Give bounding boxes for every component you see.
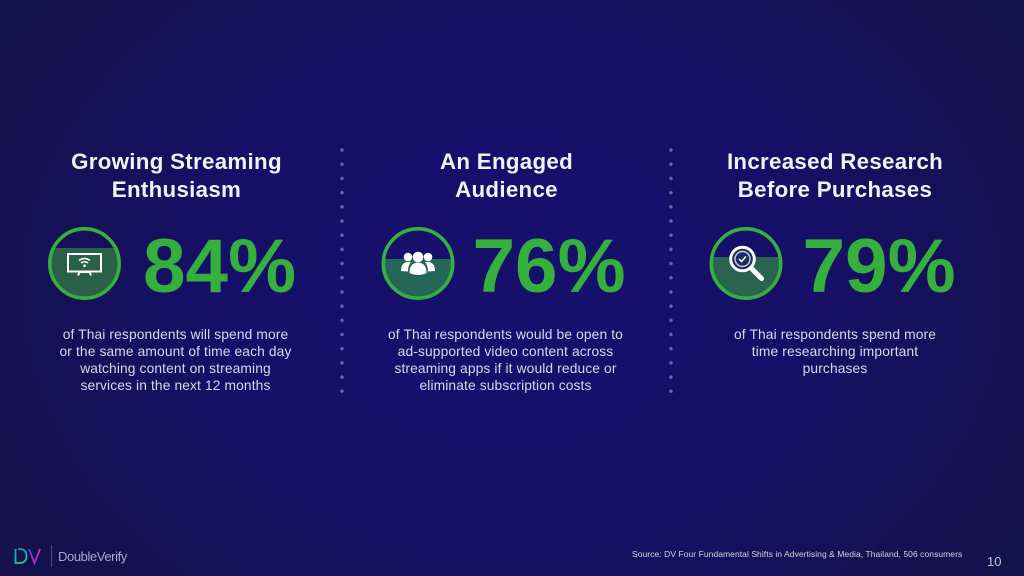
body text: time researching important bbox=[752, 344, 918, 359]
body text: watching content on streaming bbox=[80, 361, 271, 376]
heading: increased research: Increased Research bbox=[727, 149, 943, 174]
body text: of Thai respondents will spend more bbox=[63, 326, 288, 342]
statistic: 79%: 79% bbox=[802, 224, 956, 309]
heading: growing streaming: Growing Streaming bbox=[71, 149, 282, 174]
heading: increased research bbox=[727, 149, 943, 202]
heading: an engaged audience: Audience bbox=[455, 176, 558, 202]
statistic: 76%: 76% bbox=[472, 224, 626, 309]
heading: growing streaming bbox=[71, 149, 282, 202]
body text bbox=[60, 326, 292, 393]
logo: DoubleVerify: DoubleVerify bbox=[58, 548, 127, 564]
panel: growing streaming enthusiasm bbox=[48, 149, 296, 393]
body text bbox=[388, 326, 623, 393]
heading: growing streaming: Enthusiasm bbox=[112, 176, 241, 202]
body text: of Thai respondents spend more bbox=[734, 326, 936, 342]
body text: eliminate subscription costs bbox=[419, 378, 592, 393]
body text: purchases bbox=[803, 361, 867, 376]
panel: increased research before purchases bbox=[710, 149, 956, 376]
panel: an engaged audience bbox=[382, 149, 626, 393]
body text bbox=[734, 326, 936, 376]
body text: of Thai respondents would be open to bbox=[388, 326, 623, 342]
logo: DoubleVerify bbox=[14, 545, 128, 567]
icon: magnifier with check bbox=[710, 227, 782, 300]
heading: increased research: Before Purchases bbox=[738, 176, 932, 202]
icon: audience group bbox=[382, 227, 454, 300]
body text: ad-supported video content across bbox=[398, 344, 613, 359]
body text: or the same amount of time each day bbox=[60, 344, 291, 359]
heading: an engaged audience bbox=[440, 149, 573, 202]
page number: 10 bbox=[987, 554, 1001, 569]
body text: services in the next 12 months bbox=[81, 378, 270, 393]
statistic: 84%: 84% bbox=[143, 224, 296, 309]
body text: streaming apps if it would reduce or bbox=[394, 361, 617, 376]
source note: Source: DV Four Fundamental Shifts in Advertising & Media, Thailand, 506 consumers bbox=[632, 549, 962, 559]
icon: connected tv bbox=[48, 227, 121, 300]
heading: an engaged audience: An Engaged bbox=[440, 149, 573, 174]
